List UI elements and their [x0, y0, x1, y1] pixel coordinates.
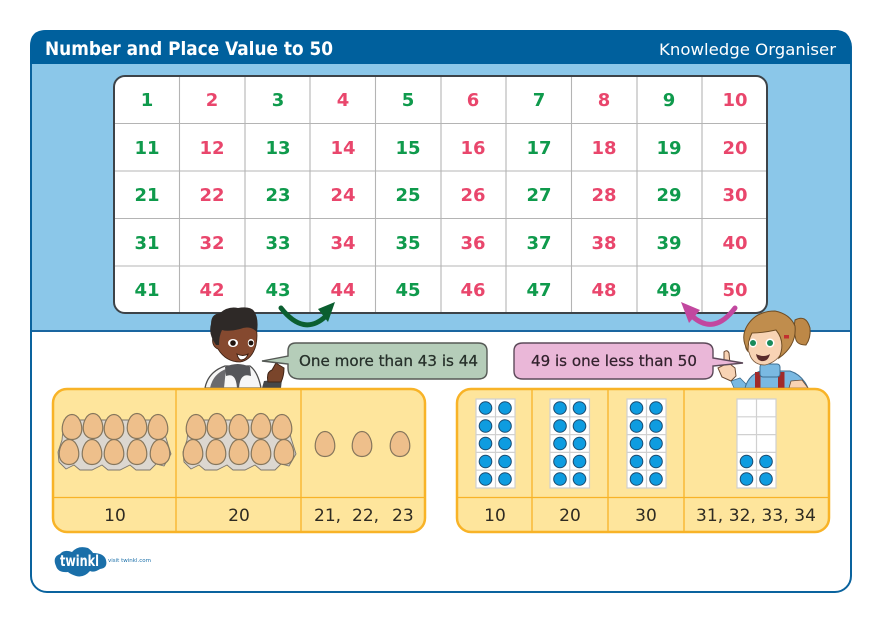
grid row 5: 50	[722, 280, 748, 301]
grid row 3: 22	[199, 185, 225, 206]
grid row 5: 48	[591, 280, 617, 301]
speech bubble: one less	[514, 343, 743, 379]
tens frame: 20	[550, 399, 590, 488]
three single eggs	[315, 432, 410, 456]
grid row 2: 20	[722, 138, 748, 159]
boy sleeve	[262, 379, 282, 388]
grid row 1	[141, 90, 748, 111]
panel: tens frames	[457, 389, 829, 532]
grid row 2	[134, 138, 748, 159]
grid row 4: 34	[330, 233, 356, 254]
grid row 1: 5	[402, 90, 414, 111]
twinkl logo	[55, 547, 151, 576]
grid row 5: 41	[134, 280, 160, 301]
grid row 3: 26	[460, 185, 486, 206]
boy eyes	[228, 339, 238, 347]
girl head	[745, 322, 788, 365]
girl hair	[744, 311, 795, 358]
boy mouth	[237, 354, 248, 360]
grid row 4: 36	[460, 233, 486, 254]
girl neck	[760, 364, 780, 377]
grid row 5: 44	[330, 280, 356, 301]
grid row 4: 39	[656, 233, 682, 254]
arrow: one less, 50 to 49	[681, 302, 735, 324]
girl sleeve	[731, 378, 746, 388]
egg tray of ten	[58, 414, 171, 470]
grid row 1: 4	[337, 90, 349, 111]
character: boy	[205, 307, 284, 388]
title: Number and Place Value to 50	[45, 38, 333, 60]
grid row 2: 19	[656, 138, 682, 159]
girl mouth	[756, 354, 770, 361]
grid row 3: 28	[591, 185, 617, 206]
tens frame: 10	[476, 399, 515, 488]
grid row 3: 27	[526, 185, 552, 206]
logo web address: visit twinkl.com	[108, 558, 151, 564]
header bar	[30, 30, 851, 64]
tens frame labels: 10	[484, 506, 506, 526]
grid row 4: 38	[591, 233, 617, 254]
grid row 1: 6	[467, 90, 479, 111]
grid row 2: 18	[591, 138, 617, 159]
egg panel labels: 22,	[352, 506, 379, 526]
twinkl logo: twinkl	[60, 552, 99, 570]
grid row 1: 8	[598, 90, 610, 111]
egg panel labels	[104, 506, 414, 526]
grid row 5: 43	[265, 280, 291, 301]
grid row 5: 45	[395, 280, 421, 301]
grid row 2: 14	[330, 138, 356, 159]
grid row 3	[134, 185, 748, 206]
grid row 1: 3	[272, 90, 284, 111]
grid row 2: 11	[134, 138, 160, 159]
boy hair	[210, 307, 258, 345]
girl ponytail	[794, 318, 810, 345]
grid row 4: 37	[526, 233, 552, 254]
speech bubble: one more: One more than 43 is 44	[299, 352, 478, 370]
character: girl	[718, 311, 810, 388]
egg panel labels: 23	[392, 506, 414, 526]
grid row 2: 16	[460, 138, 486, 159]
grid row 1: 1	[141, 90, 153, 111]
egg tray of twenty	[183, 414, 296, 470]
tens frame labels: 31, 32, 33, 34	[696, 506, 816, 526]
grid row 5: 49	[656, 280, 682, 301]
grid row 1: 7	[533, 90, 545, 111]
grid row 4: 33	[265, 233, 291, 254]
tens frame labels	[484, 506, 816, 526]
grid row 2: 13	[265, 138, 291, 159]
grid row 2: 17	[526, 138, 552, 159]
girl hair clip	[784, 335, 789, 338]
boy head	[213, 327, 257, 362]
number grid 1 to 50	[114, 76, 767, 313]
girl body	[745, 371, 808, 388]
tens frame labels: 30	[635, 506, 657, 526]
grid row 4: 32	[199, 233, 225, 254]
speech bubble: one more	[262, 343, 487, 379]
boy jacket	[205, 366, 261, 388]
grid row 5: 46	[460, 280, 486, 301]
panel: egg representations	[53, 389, 425, 532]
girl eyes	[749, 338, 757, 348]
tens frame: four counters	[737, 399, 776, 488]
grid row 5: 47	[526, 280, 552, 301]
grid row 3: 30	[722, 185, 748, 206]
grid row 4: 40	[722, 233, 748, 254]
arrow: one more, 43 to 44	[281, 302, 335, 325]
grid row 2: 12	[199, 138, 225, 159]
grid row 5	[134, 280, 748, 301]
egg panel labels: 20	[228, 506, 250, 526]
subtitle: Knowledge Organiser	[659, 40, 836, 59]
egg panel labels: 21,	[314, 506, 341, 526]
girl right hand	[789, 380, 808, 388]
boy hand	[268, 363, 284, 382]
grid row 1: 9	[663, 90, 675, 111]
grid row 3: 21	[134, 185, 160, 206]
egg panel labels: 10	[104, 506, 126, 526]
grid row 3: 29	[656, 185, 682, 206]
grid row 2: 15	[395, 138, 421, 159]
grid row 4: 35	[395, 233, 421, 254]
grid row 4	[134, 233, 748, 254]
grid row 1: 10	[722, 90, 748, 111]
grid row 5: 42	[199, 280, 225, 301]
grid row 1: 2	[206, 90, 218, 111]
tens frame: 30	[627, 399, 666, 488]
girl left hand	[718, 351, 736, 381]
grid row 3: 23	[265, 185, 291, 206]
grid row 3: 25	[395, 185, 421, 206]
grid row 4: 31	[134, 233, 160, 254]
tens frame labels: 20	[559, 506, 581, 526]
grid row 3: 24	[330, 185, 356, 206]
speech bubble: one less: 49 is one less than 50	[531, 352, 697, 370]
